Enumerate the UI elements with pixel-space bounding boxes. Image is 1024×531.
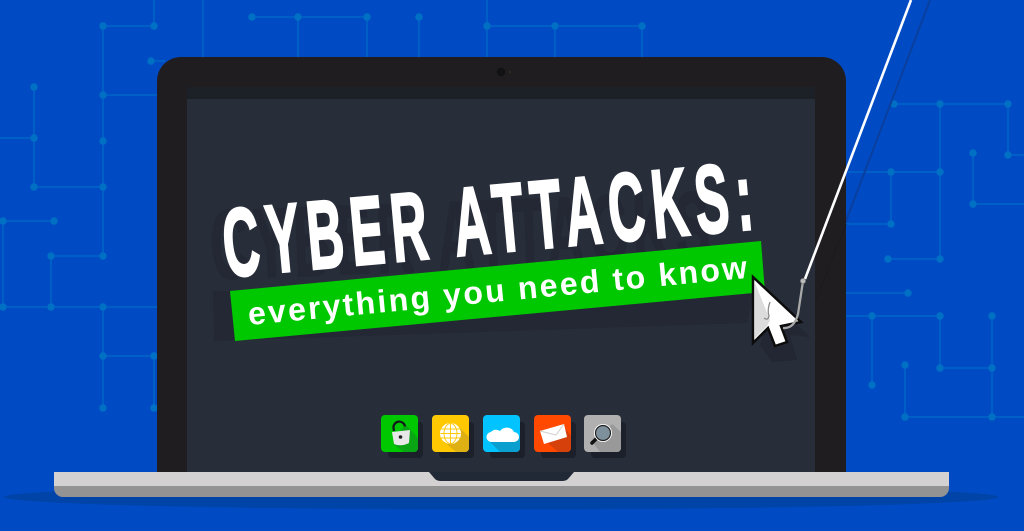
screen top bar — [187, 87, 815, 99]
webcam — [497, 68, 511, 76]
title shadow: CYBER ATTACKS — [209, 171, 712, 300]
subtitle banner — [230, 241, 765, 341]
cursor arrow — [753, 277, 801, 346]
hook point through cursor — [764, 302, 770, 319]
icon: envelope — [534, 415, 576, 458]
icon: magnifier — [584, 415, 626, 458]
icon: globe — [432, 415, 474, 458]
screen — [187, 99, 815, 472]
subtitle text: everything you need to know — [246, 249, 749, 332]
title: cyber attacks: CYBER ATTACKS: — [218, 143, 757, 298]
laptop ground shadow — [4, 484, 998, 510]
laptop base — [54, 472, 949, 497]
fishing hook — [783, 278, 806, 328]
icon row — [381, 415, 626, 458]
fishing line shadow on bezel — [816, 224, 846, 300]
laptop bezel — [157, 57, 846, 472]
laptop — [54, 57, 949, 497]
cursor shadow — [760, 300, 810, 362]
title shadow — [209, 171, 760, 341]
fishing line — [805, 0, 911, 279]
icon: cloud — [483, 415, 525, 458]
circuit board background pattern — [0, 0, 1024, 421]
icon: padlock — [381, 415, 423, 458]
base notch — [429, 472, 574, 481]
fishing line shadow on background — [816, 0, 930, 300]
